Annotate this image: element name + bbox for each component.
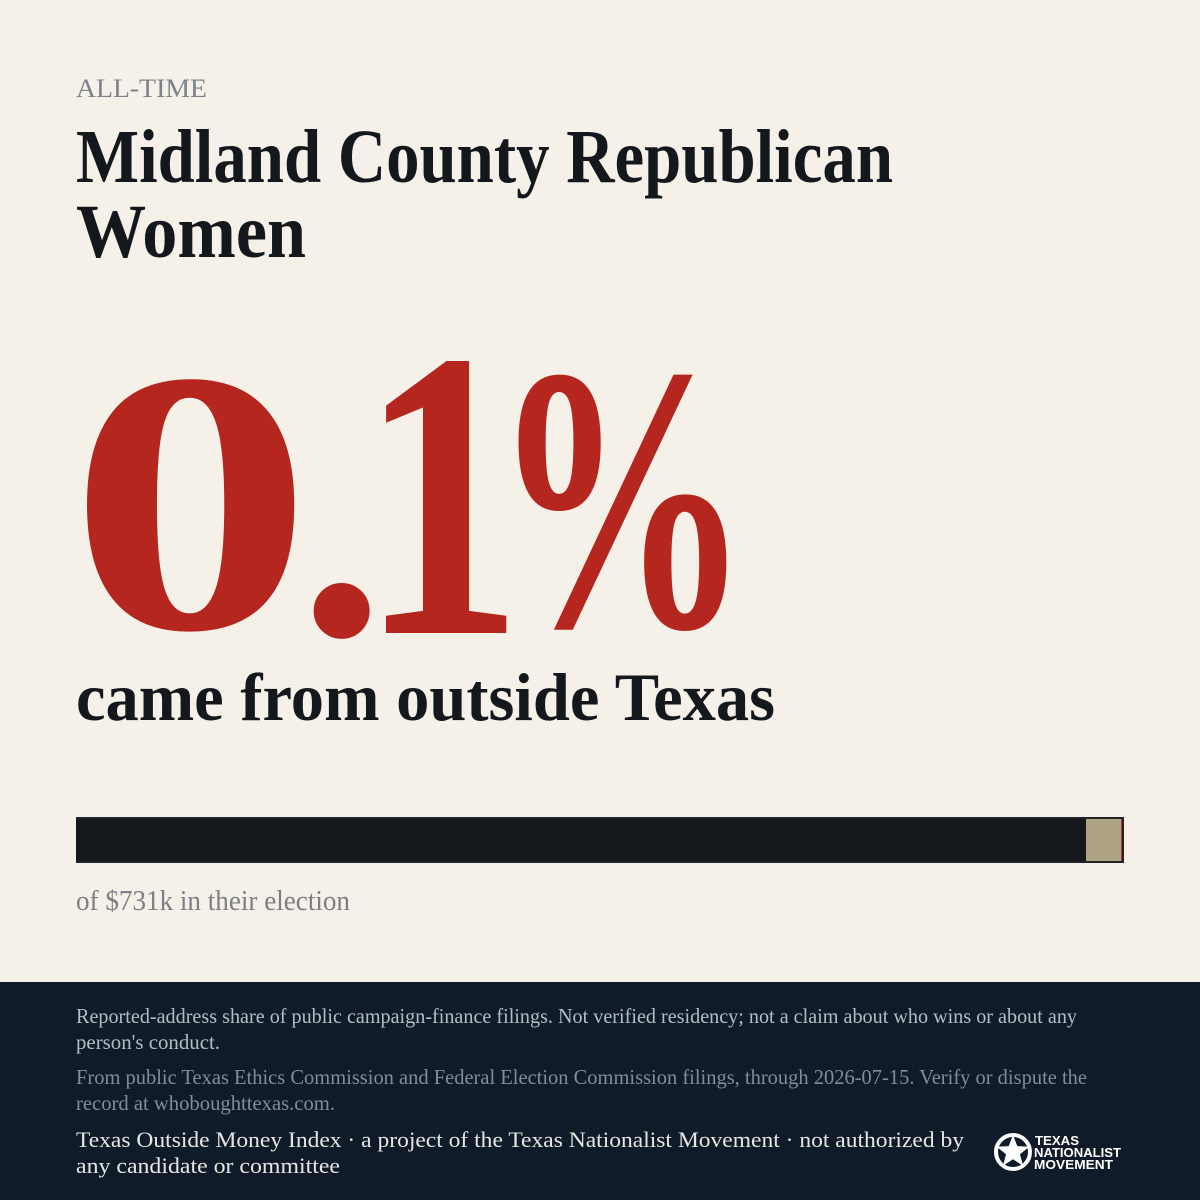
source note: From public Texas Ethics Commission and Federal Election Commission filings, through 2026-07-15. Verify or dispute the	[76, 1065, 1087, 1089]
icon: star in circle	[996, 1135, 1030, 1169]
logo wordmark: NATIONALIST	[1034, 1145, 1121, 1160]
attribution: Texas Outside Money Index · a project of the Texas Nationalist Movement · not authorized by	[76, 1127, 964, 1152]
title line 1: Midland County Republican	[76, 115, 893, 199]
percent sign: %	[492, 290, 751, 709]
eyebrow: time period: ALL-TIME	[76, 74, 207, 103]
bar track: in-state share	[76, 817, 1124, 863]
headline caption: came from outside Texas	[76, 659, 775, 735]
disclaimer note: Reported-address share of public campaign-finance filings. Not verified residency; not a claim about who wins or about any	[76, 1004, 1077, 1028]
logo: Texas Nationalist Movement	[996, 1133, 1121, 1172]
logo wordmark: TEXAS	[1035, 1133, 1079, 1148]
title: committee name	[76, 115, 893, 274]
digit 1: 1	[360, 267, 523, 723]
disclaimer note: person's conduct.	[76, 1030, 220, 1054]
headline figure: 0.1%	[68, 267, 751, 723]
bar segment: outside share tan	[1086, 819, 1121, 861]
source note	[76, 1065, 1087, 1115]
decimal point: .	[298, 327, 385, 709]
title line 2: Women	[76, 190, 306, 274]
logo wordmark	[1034, 1133, 1121, 1172]
logo wordmark: MOVEMENT	[1034, 1157, 1113, 1172]
share bar	[76, 817, 1124, 863]
bar segment: outside share red	[1120, 819, 1123, 861]
footer panel	[0, 982, 1200, 1200]
attribution	[76, 1127, 964, 1178]
bar caption: of $731k in their election	[76, 885, 350, 917]
digit 0: 0	[68, 295, 313, 710]
disclaimer note	[76, 1004, 1077, 1054]
source note: record at whoboughttexas.com.	[76, 1091, 335, 1115]
attribution: any candidate or committee	[76, 1153, 340, 1178]
